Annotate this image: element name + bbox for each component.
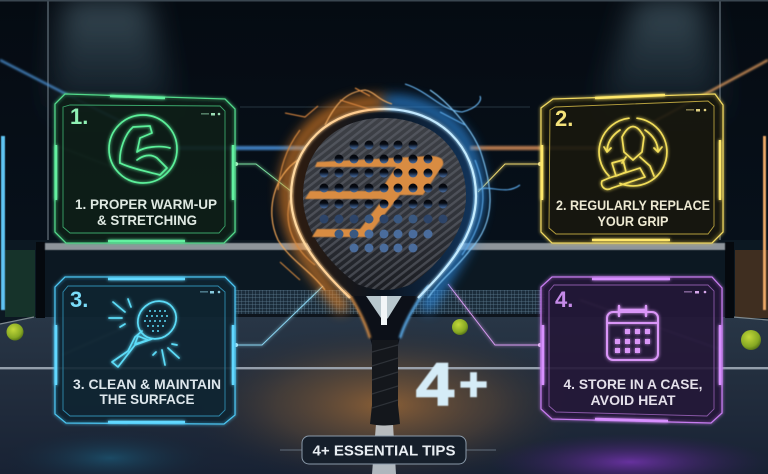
panel 2: grip xyxy=(541,94,723,243)
racket face xyxy=(303,118,466,290)
icon: calendar xyxy=(607,306,658,360)
tennis balls xyxy=(6,319,761,350)
text: 4. STORE IN A CASE, xyxy=(564,376,702,392)
panel 3: clean surface xyxy=(55,277,235,424)
racket icon mesh xyxy=(144,310,168,332)
neon light beams xyxy=(0,60,768,355)
number: 2. xyxy=(555,106,573,131)
lightning arcs xyxy=(272,84,520,298)
number: 4. xyxy=(555,287,573,312)
racket rim highlight xyxy=(291,109,476,298)
panel 4: store: AVOID HEAT xyxy=(590,392,676,408)
panel 2: grip: YOUR GRIP xyxy=(598,213,668,229)
racket head xyxy=(294,112,473,296)
energy glow xyxy=(286,102,478,310)
connector lines xyxy=(234,162,542,347)
icon: flexed arm xyxy=(109,115,177,183)
icon: person replacing grip xyxy=(599,118,667,189)
icon: racket cleaning xyxy=(109,293,184,367)
dots xyxy=(201,113,220,116)
racket holes xyxy=(320,140,448,252)
text: 3. CLEAN & MAINTAIN xyxy=(73,376,221,392)
orange logo on racket xyxy=(305,156,443,237)
handle throat xyxy=(340,280,432,345)
title pill: 4+ ESSENTIAL TIPS xyxy=(312,444,456,460)
racket with energy ring xyxy=(272,84,520,426)
dots xyxy=(684,291,706,294)
text: 1. PROPER WARM-UP xyxy=(75,196,217,212)
big 4+ numeral: 4 xyxy=(416,351,455,418)
panel 4: store xyxy=(541,277,722,423)
throat opening xyxy=(363,289,404,320)
grip xyxy=(370,340,400,426)
text: 2. REGULARLY REPLACE xyxy=(556,197,710,213)
number: 1. xyxy=(70,104,88,129)
panel 1: warm-up: & STRETCHING xyxy=(97,212,197,228)
dots xyxy=(686,109,706,112)
title pill xyxy=(280,436,496,464)
big 4+ numeral: + xyxy=(459,358,488,410)
number: 3. xyxy=(70,287,88,312)
panel 1: warm-up xyxy=(55,94,235,243)
big 4+ numeral xyxy=(416,351,488,418)
panel 3: clean surface: THE SURFACE xyxy=(100,391,194,407)
dots xyxy=(200,291,220,294)
